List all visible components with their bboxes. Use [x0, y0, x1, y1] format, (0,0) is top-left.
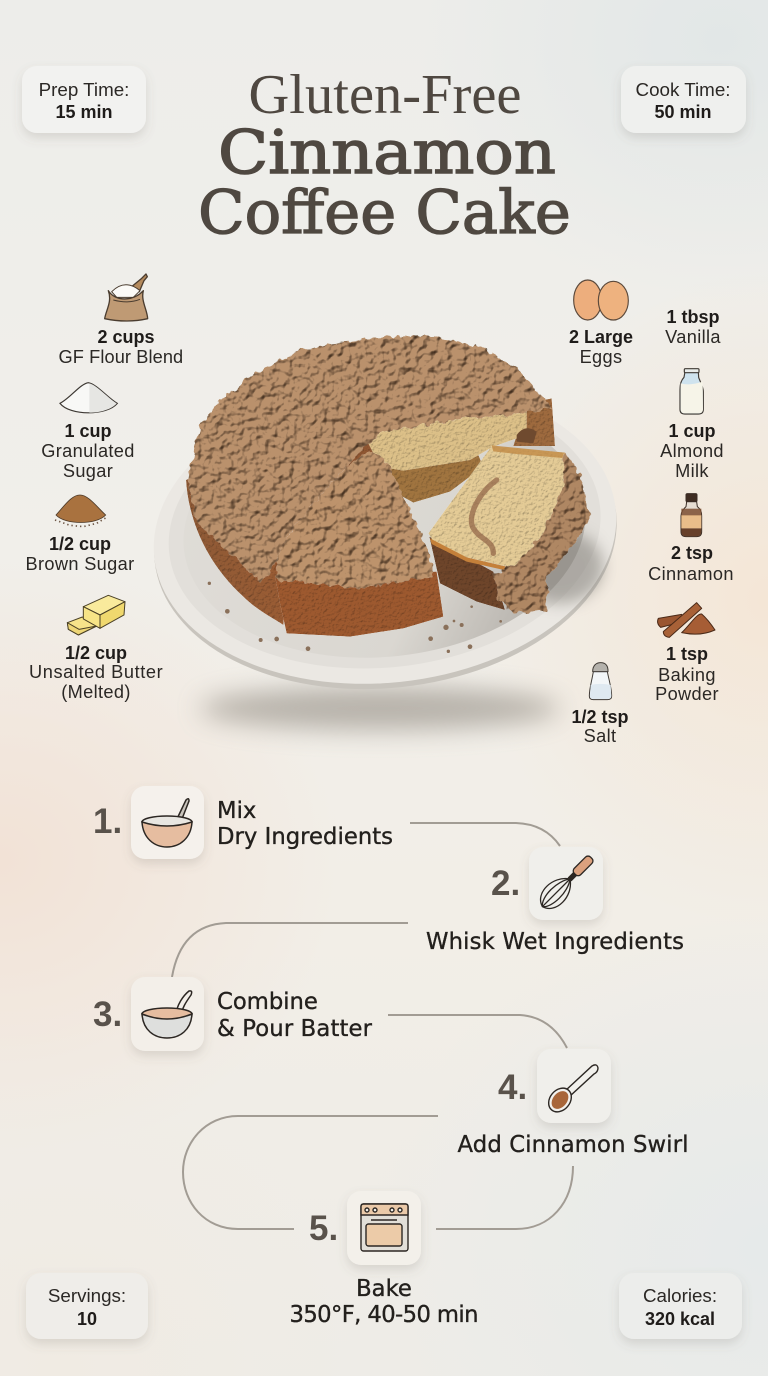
ingredient: almond milk: Milk: [675, 461, 709, 481]
icon: flour sack: [105, 274, 148, 321]
ingredient: cinnamon: Cinnamon: [648, 564, 734, 584]
step 3: & Pour Batter: [217, 1016, 373, 1042]
ingredient: vanilla: [665, 307, 721, 347]
step 5: 5.: [309, 1209, 338, 1248]
badge: servings: 10: [77, 1309, 97, 1329]
cut interior sponge: [363, 400, 527, 471]
ingredient: vanilla: 1 tbsp: [666, 307, 720, 327]
step 1: Dry Ingredients: [217, 824, 393, 850]
wedge side: [275, 572, 443, 637]
badge: calories: Calories:: [643, 1285, 717, 1306]
ingredient: salt: Salt: [584, 726, 616, 746]
ingredient: sugar: Granulated: [41, 441, 135, 461]
plate crumbs: [208, 582, 502, 653]
icon: two eggs: [574, 280, 628, 320]
badge: prep time: [22, 66, 146, 133]
ingredient: sugar: 1 cup: [64, 421, 112, 441]
step 4: Add Cinnamon Swirl: [458, 1132, 688, 1158]
icon: bowl with batter: [142, 991, 192, 1038]
title: [198, 64, 571, 248]
ingredient: butter: [29, 595, 163, 702]
icon: milk bottle: [680, 369, 703, 414]
arrow: step 4 to step 5 left loop: [183, 1116, 438, 1229]
title: Cinnamon: [218, 118, 556, 187]
step 3: [93, 977, 373, 1051]
ingredient: flour: GF Flour Blend: [58, 347, 184, 367]
step 3: 3.: [93, 995, 122, 1034]
ingredient: salt: 1/2 tsp: [571, 707, 629, 727]
arrow: step 3 to step 4: [388, 1015, 567, 1048]
icon: oven: [361, 1204, 408, 1251]
icon: spoon with cinnamon: [544, 1065, 598, 1116]
ingredient: almond milk: [660, 369, 724, 481]
step 2: 2.: [491, 864, 520, 903]
badge: cook time: 50 min: [654, 102, 712, 122]
step 5: [290, 1191, 478, 1328]
cake body side: [186, 387, 383, 625]
slice sponge: [428, 446, 571, 568]
cut interior back edge: [513, 398, 555, 446]
ingredient: cinnamon: [648, 494, 734, 584]
badge: calories: [619, 1273, 742, 1339]
ingredient: butter: (Melted): [61, 682, 131, 702]
arrow: step 1 to step 2: [410, 823, 560, 846]
cake photo on plate: [139, 335, 632, 730]
ingredient: brown sugar: 1/2 cup: [49, 534, 111, 554]
ingredient: flour: [58, 274, 184, 367]
badge: servings: Servings:: [48, 1285, 126, 1306]
ingredient: eggs: [569, 280, 633, 367]
ingredient: butter: Unsalted Butter: [29, 662, 163, 682]
icon: brown sugar pile: [55, 495, 107, 527]
badge: servings: [26, 1273, 148, 1339]
slice crumb edge: [494, 453, 591, 613]
arrow: step 2 to step 3: [172, 923, 408, 977]
arrow: step 4 to step 5 right loop: [436, 1166, 573, 1229]
icon: cinnamon sticks and powder: [658, 603, 715, 637]
icon: salt shaker: [589, 663, 612, 700]
badge: prep time: Prep Time:: [39, 79, 129, 100]
step 2: Whisk Wet Ingredients: [426, 929, 684, 955]
badge: cook time: Cook Time:: [636, 79, 730, 100]
icon: mixing bowl: [142, 799, 192, 847]
ingredient: salt: [571, 663, 629, 746]
badge: calories: 320 kcal: [645, 1309, 715, 1329]
ingredient: butter: 1/2 cup: [65, 643, 127, 663]
ingredient: baking powder: [655, 603, 719, 704]
icon: butter block: [67, 595, 125, 635]
ingredient: almond milk: Almond: [660, 441, 724, 461]
ingredient: sugar: [41, 383, 135, 481]
badge: cook time: [621, 66, 746, 133]
step 2: [426, 847, 684, 955]
ingredient: eggs: Eggs: [580, 347, 622, 367]
step 1: Mix: [217, 798, 256, 824]
step 1: [93, 786, 393, 859]
ingredient: flour: 2 cups: [97, 327, 155, 347]
step 3: Combine: [217, 989, 318, 1015]
step 4: [458, 1049, 688, 1158]
ingredient: baking powder: Powder: [655, 684, 719, 704]
badge: prep time: 15 min: [55, 102, 113, 122]
step 5: 350°F, 40-50 min: [290, 1302, 478, 1328]
step 5: Bake: [356, 1276, 412, 1302]
ingredient: baking powder: Baking: [658, 665, 716, 685]
cut interior lower layer: [380, 455, 483, 503]
wedge crumb top: [276, 450, 433, 588]
ingredient: brown sugar: Brown Sugar: [26, 554, 134, 574]
ingredient: baking powder: 1 tsp: [666, 644, 708, 664]
title: Gluten-Free: [249, 64, 521, 126]
ingredient: eggs: 2 Large: [569, 327, 633, 347]
step 1: 1.: [93, 802, 122, 841]
title: Coffee Cake: [198, 178, 571, 248]
step 4: 4.: [498, 1068, 527, 1107]
icon: whisk: [534, 850, 599, 915]
slice brown base: [429, 537, 505, 610]
ingredient: sugar: Sugar: [63, 461, 113, 481]
cake crumb top: [187, 335, 552, 582]
ingredient: brown sugar: [26, 495, 134, 574]
ingredient: cinnamon: 2 tsp: [671, 543, 713, 563]
ingredient: almond milk: 1 cup: [668, 421, 716, 441]
icon: extract bottle: [681, 494, 702, 537]
icon: sugar pile: [60, 383, 117, 413]
slice cinnamon swirl: [471, 480, 497, 553]
plate: [139, 361, 632, 711]
ingredient: vanilla: Vanilla: [665, 327, 721, 347]
